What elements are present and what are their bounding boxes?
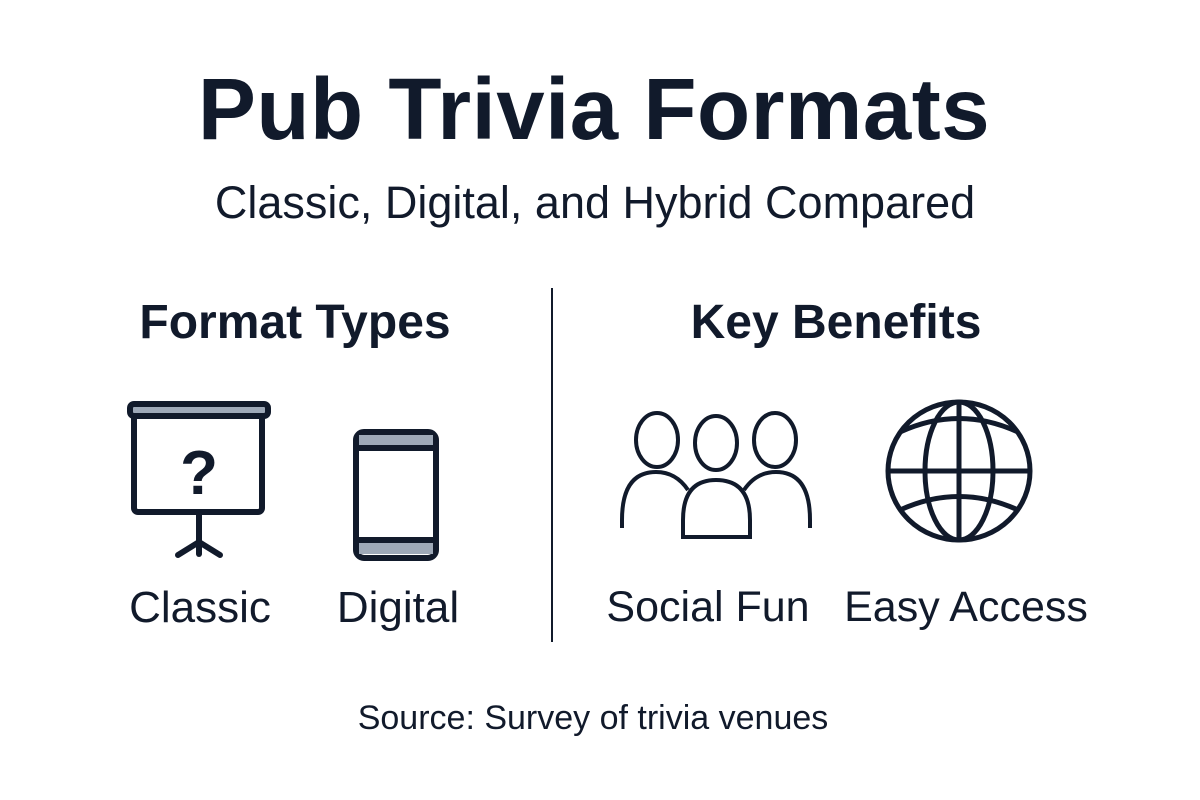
- icon: projector screen: [130, 404, 268, 555]
- label: digital: Digital: [337, 583, 459, 632]
- heading: key benefits: Key Benefits: [691, 296, 981, 349]
- icon: phone: [356, 432, 436, 558]
- icon: globe: [888, 402, 1030, 540]
- icon: projector screen: ?: [180, 439, 218, 508]
- icon: people: [622, 413, 810, 537]
- heading: format types: Format Types: [139, 296, 451, 349]
- subtitle: Classic, Digital, and Hybrid Compared: [215, 177, 975, 228]
- label: classic: Classic: [129, 583, 271, 632]
- source note: Source: Survey of trivia venues: [358, 699, 828, 737]
- title: Pub Trivia Formats: [198, 61, 990, 158]
- label: easy access: Easy Access: [844, 583, 1088, 631]
- divider: [551, 288, 553, 642]
- label: social fun: Social Fun: [606, 583, 810, 631]
